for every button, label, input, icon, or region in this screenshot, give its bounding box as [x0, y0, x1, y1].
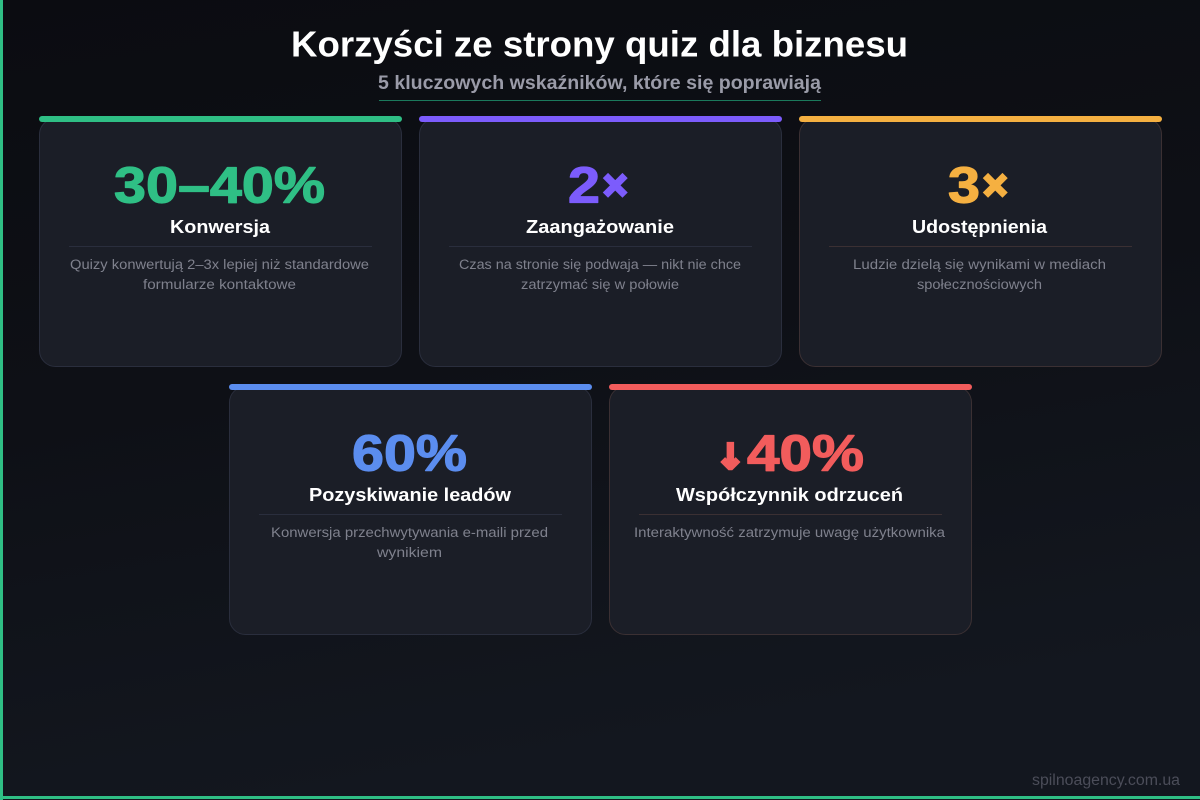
stat: 30–40%: 30–40% [114, 156, 325, 214]
description: Konwersja: Quizy konwertują 2–3x lepiej niż standardowe [70, 257, 369, 272]
stat: 3×: × [981, 165, 1010, 205]
subtitle: 5 kluczowych wskaźników, które się poprawiają [378, 73, 821, 94]
description: Pozyskiwanie leadów: Konwersja przechwytywania e-maili przed [271, 525, 548, 540]
stat: 3×: 3 [948, 156, 980, 214]
description: Współczynnik odrzuceń: Interaktywność zatrzymuje uwagę użytkownika [634, 525, 946, 540]
accent bar: green [39, 116, 402, 122]
stat: 60%: 60% [352, 424, 467, 482]
description: Zaangażowanie: Czas na stronie się podwaja — nikt nie chce [459, 257, 741, 272]
stat: ↓40%: 40% [747, 424, 864, 482]
description: Udostępnienia: Ludzie dzielą się wynikami w mediach [853, 257, 1106, 272]
stat: ↓40%: ↓ [716, 438, 744, 478]
heading: Pozyskiwanie leadów: Pozyskiwanie leadów [309, 484, 512, 505]
description: Konwersja [70, 257, 369, 292]
description: Zaangażowanie: zatrzymać się w połowie [521, 277, 679, 292]
heading: Udostępnienia: Udostępnienia [912, 216, 1048, 237]
description: Pozyskiwanie leadów [271, 525, 548, 560]
stat: ↓40% [716, 424, 864, 482]
heading: Konwersja: Konwersja [170, 216, 271, 237]
stat: 2×: × [601, 165, 630, 205]
description: Zaangażowanie [459, 257, 741, 292]
heading: Współczynnik odrzuceń: Współczynnik odrzuceń [676, 484, 903, 505]
panel: Zaangażowanie [419, 116, 782, 366]
panel: Konwersja [39, 116, 402, 366]
heading: Zaangażowanie: Zaangażowanie [526, 216, 674, 237]
stat: 2×: 2 [568, 156, 600, 214]
title: Korzyści ze strony quiz dla biznesu [291, 24, 908, 64]
panel: Udostępnienia [799, 116, 1162, 366]
accent bar: purple [419, 116, 782, 122]
description: Udostępnienia: społecznościowych [917, 277, 1042, 292]
stat: 3× [948, 156, 1010, 214]
panel: Współczynnik odrzuceń [609, 384, 972, 634]
footer: website: spilnoagency.com.ua [1032, 772, 1180, 789]
stat: 2× [568, 156, 630, 214]
accent bar: red [609, 384, 972, 390]
accent bar: blue [229, 384, 592, 390]
description: Udostępnienia [853, 257, 1106, 292]
accent bar: amber [799, 116, 1162, 122]
panel: Pozyskiwanie leadów [229, 384, 592, 634]
description: Konwersja: formularze kontaktowe [143, 277, 296, 292]
description: Pozyskiwanie leadów: wynikiem [376, 545, 442, 560]
